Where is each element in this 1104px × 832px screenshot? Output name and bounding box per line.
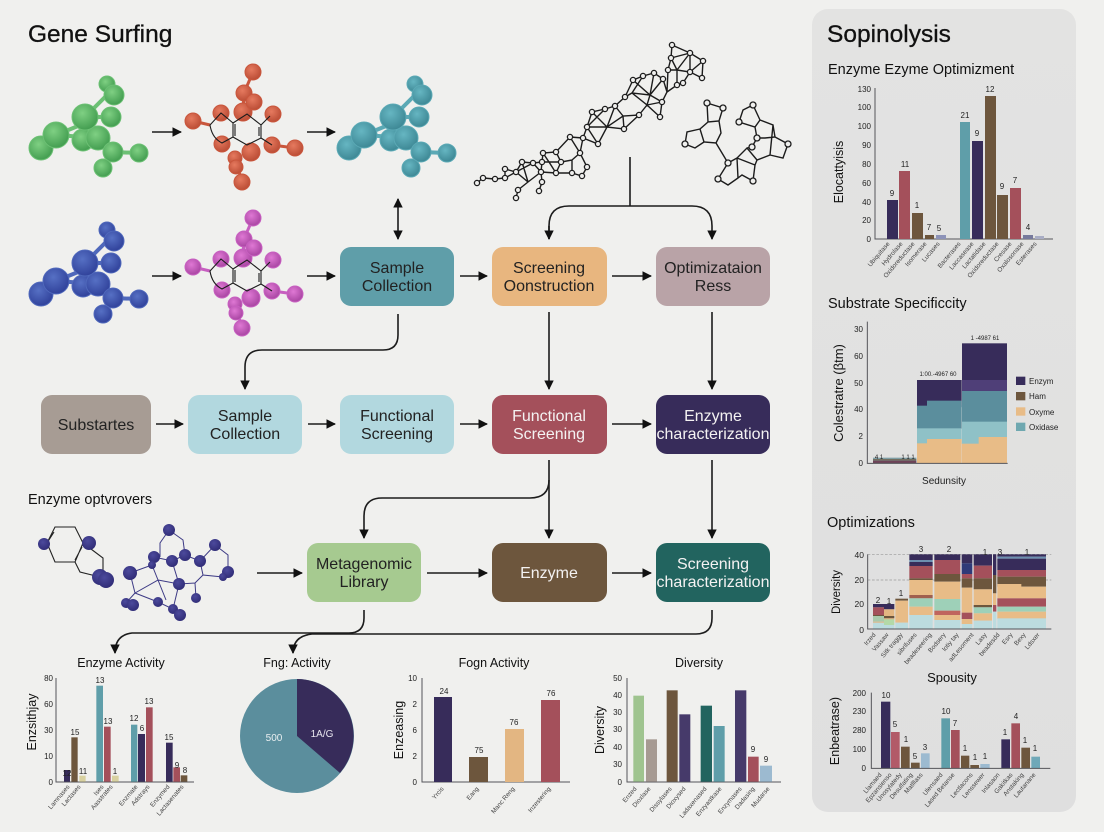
molecule: red [185,64,303,190]
chart: fungal activity bars: 75 [475,746,484,755]
chart: enzyme activity: 13 [145,697,154,706]
chart: enzyme activity: 8 [183,766,188,775]
title: Gene Surfing [28,21,172,48]
chart: diversity bars: Enzymases [717,786,744,816]
chart: spousity: 10 [942,707,951,716]
chart: spousity: Unosylatedy [876,771,904,803]
chart: enzyme optimization: Esterases [1015,241,1039,267]
chart: optimizations: Ldsxer [1024,631,1042,651]
chart: enzyme activity: Lactases [61,784,83,808]
chart: substrate specificity: 50 [854,379,864,388]
chart: spousity: 1 [983,752,988,761]
chart: optimizations: 20 [855,599,864,609]
chart: optimizations: 3 [919,545,924,554]
chart: optimizations: 1 [887,597,892,606]
chart: enzyme activity: 11 [79,767,88,776]
chart: enzyme activity: 15 [165,733,174,742]
heading: spousity: Spousity [927,670,977,685]
chart: spousity: Llamaed [862,771,884,795]
box: screening characterization [656,543,770,602]
box: sample collection two: Sample [218,408,272,425]
chart: substrate specificity: 40 [854,405,864,414]
chart: enzyme optimization: 0 [867,235,872,244]
chart: substrate specificity: Colestratre (βtm) [831,344,846,442]
molecule: teal [337,76,456,177]
chart: fungal activity bars: 10 [408,674,418,683]
chart: spousity: Anstaking [1002,771,1026,798]
chart: optimizations: 3 [998,548,1003,557]
box: screening characterization: Screening [677,556,749,573]
chart: enzyme optimization: 9 [1000,182,1005,191]
chart: enzyme activity: 12 [63,769,72,778]
chart: optimizations: Diversity [831,570,843,614]
chart: diversity bars: 30 [613,725,623,734]
chart: enzyme optimization: 21 [961,111,970,120]
box: enzyme characterization: characterization [657,426,769,443]
chart: spousity: 230 [853,707,867,716]
molecule: navy network [121,524,234,621]
chart: diversity bars: Enzed [622,785,639,804]
chart: optimizations: 0 [859,625,864,635]
chart: spousity: Desulfating [889,771,915,801]
chart: enzyme optimization: Lactatidase [961,240,988,270]
arrow: library to enzyme activity [115,610,364,653]
arrow: purple to sample collection [307,275,335,277]
chart: substrate specificity: 1 -4987 61 [971,336,1000,342]
chart: enzyme optimization: Elocattyisis [832,141,846,203]
chart: diversity bars: 50 [613,674,623,683]
chart: fungal activity bars: Manc Reng [490,785,517,815]
heading: optimizations: Optimizations [827,515,915,531]
chart: spousity: 280 [853,726,867,735]
chart: enzyme optimization: 90 [862,141,872,150]
box: screening construction [492,247,607,306]
chart: substrate specificity [831,322,1059,487]
chart: diversity bars: Enzyastkase [695,785,724,818]
chart title: Fng: Activity [263,656,331,670]
chart: enzyme optimization: Oxidoreductase [966,240,1001,280]
chart: spousity: Inlasaon [981,771,1002,795]
box: enzyme characterization: Enzyme [684,408,742,425]
chart: substrate specificity: 30 [854,325,864,334]
box: functional screening light: Functional [360,408,434,425]
chart: pie [240,656,354,793]
chart: enzyme optimization: Cresase [993,240,1014,264]
chart title: Fogn Activity [459,656,530,670]
chart: spousity: 1 [1003,728,1008,737]
chart: substrate specificity: Sedunsity [922,476,966,487]
box: substrates: Substartes [58,417,134,434]
chart: enzyme optimization: Isomerase [904,240,929,268]
arrow [612,423,651,425]
chart: diversity bars: Dioxysed [665,785,688,810]
chart: substrate specificity: Enzym [1029,377,1054,386]
chart: substrate specificity: Oxidase [1029,423,1059,432]
chart: optimizations: Sitk traggy [880,631,905,659]
molecule: navy ring [38,527,114,588]
chart title: Diversity [675,656,724,670]
box: functional screening light: Screening [361,426,433,443]
chart: enzyme optimization [832,85,1053,280]
chart: enzyme activity: 13 [96,676,105,685]
chart: enzyme optimization: 20 [862,216,872,225]
chart: optimizations [831,545,1051,666]
chart: spousity: 1 [963,744,968,753]
chart: enzyme activity: Enzsithjay [25,693,39,750]
chart: spousity: Gakitkas [993,772,1015,795]
chart: enzyme optimization: 1 [915,201,920,210]
chart: spousity: 3 [923,743,928,752]
chart: optimizations: Bexy [1013,631,1028,647]
chart: spousity: 1 [1033,744,1038,753]
chart: fungal activity bars: 76 [510,718,519,727]
chart: optimizations: 40 [855,550,864,560]
chart: enzyme activity: 6 [140,724,145,733]
chart: optimizations: Irzed [863,631,878,647]
heading: enzyme optimizers: Enzyme optvrovers [28,492,152,508]
chart: spousity: 1 [904,735,909,744]
chart: fungal activity bars: 2 [413,700,418,709]
chart: enzyme activity: Ises [93,784,106,797]
chart: substrate specificity: Oxyme [1029,408,1055,417]
chart: diversity bars: Mudarse [750,785,772,809]
box: sample collection two: Collection [210,426,280,443]
arrow [612,275,651,277]
chart: enzyme optimization: 40 [862,198,872,207]
box: enzyme: Enzyme [520,565,578,582]
box: optimization [656,247,770,306]
chart: spousity: 0 [862,764,867,773]
chart: enzyme activity: 80 [44,674,54,683]
chart: optimizations: Bodsery [927,631,948,654]
heading: substrate specificity: Substrate Specificcity [828,296,967,312]
chart: optimizations: Esry [1001,631,1015,646]
box: screening characterization: characterization [657,574,769,591]
arrow: red to teal [307,131,335,133]
chart: diversity bars [593,656,781,820]
chart: enzyme activity: 0 [49,778,54,787]
arrow: functional screening to library [364,460,549,538]
chart: enzyme optimization: Laccasease [948,240,976,271]
chart: pie: 1A/G [311,729,334,740]
chart: enzyme activity: Aasstrates [90,784,115,811]
arrow [156,423,183,425]
panel heading: Sopinolysis [827,21,951,48]
chart: diversity bars: 9 [751,745,756,754]
chart: enzyme optimization: 80 [862,160,872,169]
chart: enzyme activity: Lamnases [47,784,72,811]
chart: enzyme optimization: Bacterases [937,241,963,270]
chart: substrate specificity: 60 [854,352,864,361]
chart: diversity bars: Ladaxenased [678,785,709,820]
box: substrates [41,395,151,454]
chart: enzyme optimization: 130 [858,85,872,94]
chart: enzyme optimization: Lucases [921,241,942,264]
arrow [308,423,335,425]
chart: spousity: Matlllass [903,772,925,795]
chart: enzyme activity [25,656,194,817]
chart: optimizations: 20 [855,575,864,585]
chart: enzyme optimization: 12 [986,85,995,94]
chart: fungal activity bars: 0 [413,778,418,787]
chart: optimizations: sibrifuses [896,632,919,657]
arrow: green to red [152,131,181,133]
chart: diversity bars: 0 [618,778,623,787]
box: enzyme [492,543,607,602]
chart: fungal activity bars [392,656,570,815]
chart: fungal activity bars: Yrcis [431,786,446,801]
chart: spousity: 7 [953,719,958,728]
chart: diversity bars: Dissylases [649,786,674,814]
chart: optimizations: 2 [876,596,881,605]
chart: fungal activity bars: 24 [440,687,449,696]
chart: diversity bars: 9 [764,755,769,764]
chart: enzyme optimization: Oxalosonase [996,240,1026,274]
box: metagenomic library: Metagenomic [316,556,412,573]
chart: spousity [828,689,1050,809]
chart: spousity: Lenssewer [961,771,987,800]
arrow: branch from chain to screening and optimization [549,157,712,239]
box: sample collection two [188,395,302,454]
box: sample collection [340,247,454,306]
chart: enzyme activity: 15 [71,728,80,737]
chart: enzyme activity: Adstrays [130,784,152,807]
chart: spousity: 1 [1023,736,1028,745]
chart: diversity bars: 30 [613,760,623,769]
arrow [460,423,487,425]
arrow: characterization to fungal activity [293,610,712,653]
panel: sopinolysis [812,9,1076,812]
heading: enzyme optimization: Enzyme Ezyme Optimizment [828,62,1014,78]
arrow: screening down [548,312,550,389]
chart: spousity: 10 [882,691,891,700]
chart: fungal activity bars: 2 [413,752,418,761]
chart: enzyme optimization: 9 [890,189,895,198]
chart: enzyme optimization: 11 [901,160,910,169]
box: functional screening red: Screening [513,426,585,443]
chart: spousity: 5 [913,752,918,761]
box: screening construction: Oonstruction [504,278,594,295]
molecule: skeletal chain [474,42,706,201]
box: metagenomic library [307,543,421,602]
arrow: characterization to screening [711,460,713,538]
chart: enzyme optimization: 100 [858,103,872,112]
chart: pie: 500 [266,733,283,744]
chart title: Enzyme Activity [77,656,166,670]
chart: spousity: Enbeatrase) [828,697,842,765]
chart: enzyme optimization: 5 [937,224,942,233]
chart: spousity: 5 [893,720,898,729]
chart: optimizations: beadesdd [978,631,1002,658]
chart: optimizations: adLesoment [948,632,976,663]
chart: substrate specificity: 1:00.-4967 60 [919,372,957,378]
arrow [257,572,302,574]
chart: substrate specificity: Ham [1029,392,1046,401]
chart: enzyme activity: 12 [130,714,139,723]
molecule: blue [29,222,148,323]
chart: enzyme optimization: 60 [862,179,872,188]
chart: optimizations: Lasy [974,631,989,647]
box: functional screening red: Functional [512,408,586,425]
box: sample collection: Sample [370,260,424,277]
chart: substrate specificity: 0 [859,459,864,468]
arrow: blue to purple [152,275,181,277]
chart: optimizations: Vassaw [871,631,891,653]
chart: spousity: Lased Betanse [924,771,957,809]
arrow [460,275,487,277]
chart: enzyme activity: 60 [44,700,54,709]
chart: enzyme activity: 1 [113,767,118,776]
chart: fungal activity bars: 76 [547,689,556,698]
chart: enzyme activity: 13 [104,717,113,726]
chart: diversity bars: Diversity [593,705,607,754]
chart: spousity: Ulensaed [922,771,945,797]
chart: spousity: 200 [853,689,867,698]
chart: spousity: Epzansienso [865,771,894,804]
box: metagenomic library: Library [340,574,388,591]
chart: optimizations: beadeseering [903,631,934,666]
box: functional screening light [340,395,454,454]
arrow: optimization down [711,312,713,389]
arrow: double-headed to teal molecule [397,199,399,239]
chart: enzyme optimization: 100 [858,122,872,131]
chart: fungal activity bars: Enzeasing [392,701,406,759]
chart: optimizations: 1 [1025,548,1030,557]
box: enzyme characterization [656,395,770,454]
chart: enzyme optimization: Oxidoreductase [882,240,917,280]
chart: diversity bars: 40 [613,743,623,752]
chart: spousity: Lautanane [1013,771,1038,799]
chart: enzyme optimization: 7 [927,223,932,232]
chart: enzyme activity: Enzymed [149,783,172,809]
box: sample collection: Collection [362,278,432,295]
chart: enzyme optimization: Hydrolase [881,240,905,267]
chart: enzyme optimization: 9 [975,129,980,138]
chart: optimizations: 1 [899,589,904,598]
chart: substrate specificity: 4 1 [875,455,884,461]
chart: fungal activity bars: Inzestering [527,785,553,814]
box: functional screening red [492,395,607,454]
box: optimization: Ress [695,278,731,295]
chart: spousity: 1 [973,753,978,762]
molecule: green [29,76,148,177]
chart: spousity: Lectlacons [950,772,975,800]
chart: substrate specificity: 1 1 1 [901,455,915,461]
chart: spousity: 100 [853,745,867,754]
arrow: functional screening to enzyme [548,480,550,538]
box: optimization: Optimizataion [664,260,762,277]
chart: substrate specificity: 2 [859,432,864,441]
chart: enzyme optimization: 7 [1013,176,1018,185]
chart: enzyme activity: 10 [44,752,54,761]
chart: enzyme activity: 9 [175,761,180,770]
arrow [427,572,487,574]
chart: fungal activity bars: Eang [466,785,481,802]
chart: optimizations: lotiy tay [941,631,961,653]
chart: enzyme activity: Enzmate [118,783,140,808]
chart: enzyme activity: Lactasenates [156,784,186,817]
chart: diversity bars: Dioxlase [631,785,653,809]
chart: optimizations: 1 [983,548,988,557]
chart: fungal activity bars: 6 [413,726,418,735]
chart: optimizations: 2 [947,545,952,554]
chart: enzyme optimization: Ubiquitase [867,240,892,268]
chart: enzyme activity: 30 [44,726,54,735]
chart: diversity bars: 40 [613,691,623,700]
chart: diversity bars: Dadasing [734,785,757,811]
molecule: purple [185,210,303,336]
molecule: skeletal rings [682,100,791,185]
chart: enzyme optimization: 4 [1026,223,1031,232]
arrow [612,572,651,574]
chart: spousity: 4 [1014,712,1019,721]
chart: diversity bars: 30 [613,708,623,717]
arrow: sample collection to row two [245,314,398,389]
box: screening construction: Screening [513,260,585,277]
